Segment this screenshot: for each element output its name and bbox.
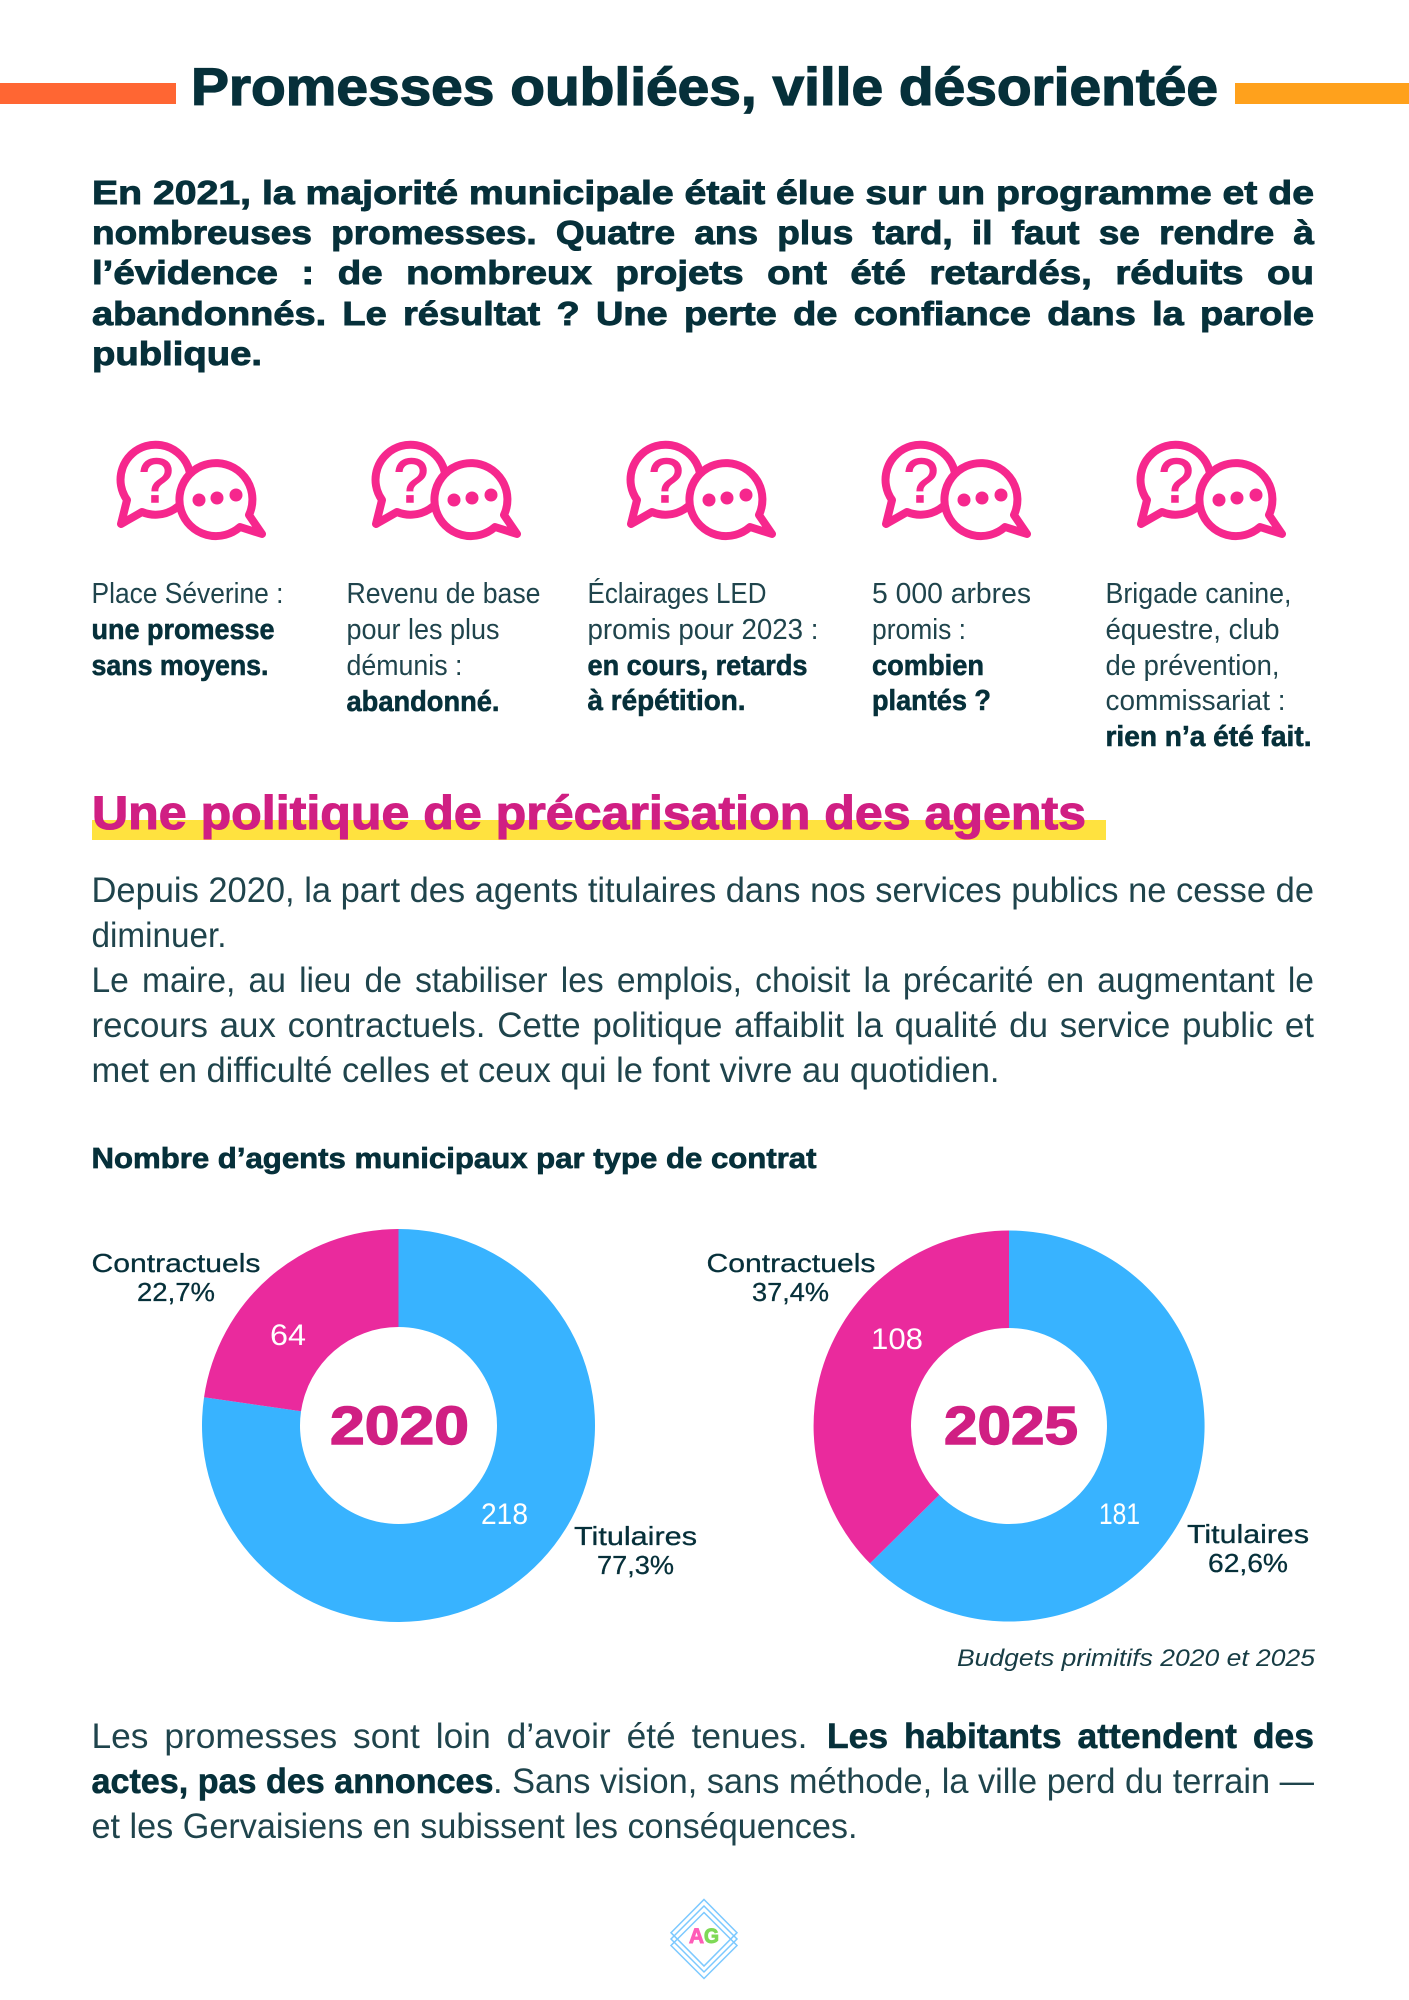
section heading with highlight: Une politique de précarisation des agents — [92, 786, 1086, 839]
logo AG — [671, 1900, 737, 1978]
icon: speech bubbles — [631, 445, 772, 536]
label contractuels 2020: 22,7% — [137, 1277, 215, 1307]
body paragraph: agents — [92, 871, 1314, 1090]
caption 3: à répétition. — [588, 685, 746, 717]
icon: speech bubbles: ? — [139, 447, 173, 516]
caption 3: promis pour 2023 : — [588, 614, 818, 646]
caption 5: équestre, club — [1106, 614, 1280, 646]
label contractuels 2025 — [706, 1248, 876, 1307]
caption 2: pour les plus — [346, 614, 500, 646]
segment: titulaires 2025 — [870, 1230, 1205, 1622]
caption 2: abandonné. — [346, 686, 500, 718]
promise column 2 — [346, 445, 540, 718]
intro paragraph: abandonnés. Le résultat ? Une perte de confiance dans la parole — [92, 295, 1314, 332]
segment: contractuels 2025 — [814, 1230, 1009, 1563]
caption 4: combien — [872, 650, 984, 682]
title band — [0, 58, 1409, 117]
caption 1: sans moyens. — [92, 650, 268, 682]
intro paragraph: l’évidence : de nombreux projets ont été retardés, réduits ou — [92, 254, 1314, 291]
icon: speech bubbles: ? — [904, 447, 938, 516]
chart heading: Nombre d’agents municipaux par type de contrat — [92, 1143, 817, 1175]
closing paragraph: Les habitants attendent des — [827, 1717, 1314, 1756]
label contractuels 2025: 37,4% — [752, 1277, 829, 1307]
value 64: 64 — [270, 1319, 306, 1352]
segment: titulaires 2020 — [202, 1229, 595, 1622]
value 181: 181 — [1099, 1498, 1140, 1531]
logo AG: A — [689, 1925, 704, 1948]
icon: speech bubbles: ? — [1159, 447, 1193, 516]
closing paragraph: Les promesses sont loin d’avoir été tenues. — [92, 1717, 808, 1756]
caption 3 — [588, 577, 818, 717]
label titulaires 2025 — [1187, 1519, 1309, 1578]
caption 4: 5 000 arbres — [872, 578, 1031, 610]
year label 2020: 2020 — [330, 1396, 469, 1456]
caption 2: Revenu de base — [346, 578, 540, 610]
label titulaires 2020 — [574, 1521, 697, 1580]
caption 5 — [1106, 578, 1312, 753]
value 218: 218 — [481, 1498, 528, 1531]
caption 2 — [346, 578, 540, 718]
body paragraph: agents: met en difficulté celles et ceux qui le font vivre au quotidien. — [92, 1051, 1000, 1090]
caption 1: Place Séverine : — [92, 578, 284, 610]
label contractuels 2025: Contractuels — [706, 1248, 876, 1278]
caption 3: Éclairages LED — [588, 577, 766, 610]
caption 1: une promesse — [92, 614, 274, 646]
icon: speech bubbles — [121, 445, 262, 536]
icon: speech bubbles: ? — [394, 447, 428, 516]
value 108: 108 — [871, 1323, 923, 1356]
left orange bar — [0, 83, 176, 104]
logo AG: G — [704, 1925, 719, 1948]
label contractuels 2020 — [92, 1248, 260, 1307]
label contractuels 2020: Contractuels — [92, 1248, 260, 1278]
caption 5: de prévention, — [1106, 650, 1280, 682]
caption 5: Brigade canine, — [1106, 578, 1292, 610]
icon: speech bubbles — [886, 445, 1027, 536]
icon: speech bubbles — [376, 445, 517, 536]
caption 4: plantés ? — [872, 685, 991, 717]
caption 2: démunis : — [346, 650, 462, 682]
closing paragraph: actes, pas des annonces — [92, 1762, 494, 1801]
segment: contractuels 2020 — [204, 1229, 398, 1411]
promise column 5 — [1106, 445, 1312, 753]
promise column 4 — [872, 445, 1031, 717]
label titulaires 2020: 77,3% — [597, 1550, 674, 1580]
label titulaires 2025: 62,6% — [1208, 1548, 1288, 1578]
caption 5: rien n’a été fait. — [1106, 721, 1312, 753]
icon: speech bubbles: ? — [649, 447, 683, 516]
promise column 3 — [588, 445, 818, 717]
caption 3: en cours, retards — [588, 650, 808, 682]
body paragraph: agents: Depuis 2020, la part des agents titulaires dans nos services publics ne cesse de — [92, 871, 1314, 910]
source note: Budgets primitifs 2020 et 2025 — [957, 1645, 1316, 1672]
right amber bar — [1235, 83, 1409, 104]
intro paragraph — [92, 174, 1315, 372]
closing paragraph: . Sans vision, sans méthode, la ville perd du terrain — — [493, 1762, 1314, 1801]
year label 2025: 2025 — [944, 1396, 1078, 1456]
donut chart 2025 — [706, 1230, 1309, 1622]
intro paragraph: publique. — [92, 335, 262, 372]
closing paragraph: et les Gervaisiens en subissent les conséquences. — [92, 1807, 858, 1846]
intro paragraph: En 2021, la majorité municipale était élue sur un programme et de — [92, 174, 1314, 211]
body paragraph: agents: diminuer. — [92, 916, 226, 955]
caption 4: promis : — [872, 614, 966, 646]
body paragraph: agents: recours aux contractuels. Cette politique affaiblit la qualité du service public et — [92, 1006, 1314, 1045]
label titulaires 2020: Titulaires — [574, 1521, 697, 1551]
caption 5: commissariat : — [1106, 685, 1286, 717]
closing paragraph — [92, 1717, 1314, 1846]
icon: speech bubbles — [1141, 445, 1282, 536]
label titulaires 2025: Titulaires — [1187, 1519, 1309, 1549]
body paragraph: agents: Le maire, au lieu de stabiliser les emplois, choisit la précarité en augmentant le — [92, 961, 1314, 1000]
title: Promesses oubliées, ville désorientée — [191, 58, 1218, 117]
caption 1 — [92, 578, 284, 682]
intro paragraph: nombreuses promesses. Quatre ans plus tard, il faut se rendre à — [92, 214, 1315, 251]
donut chart 2020 — [92, 1229, 697, 1622]
caption 4 — [872, 578, 1031, 717]
promise column 1 — [92, 445, 284, 682]
